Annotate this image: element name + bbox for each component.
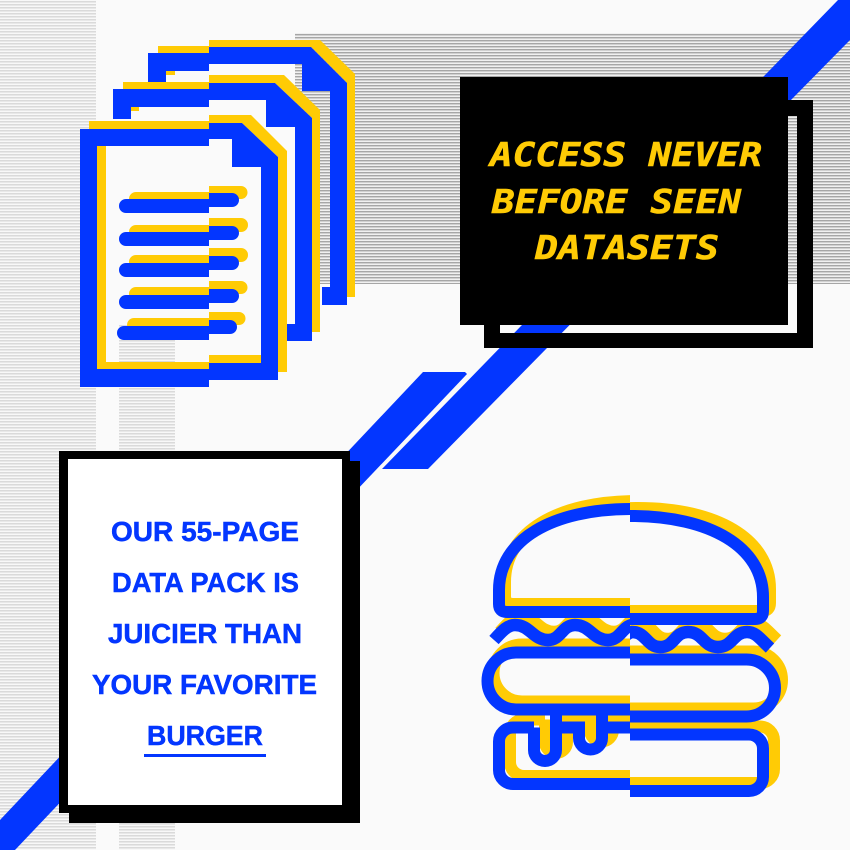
icon: stack of documents: [80, 40, 355, 387]
panel text: BURGER: [147, 720, 263, 751]
panel heading: ACCESS NEVER: [488, 135, 762, 174]
document: middle page: [113, 75, 320, 341]
underline: [144, 754, 266, 757]
document: front page: [80, 115, 287, 387]
document text lines: [117, 186, 248, 340]
burger left half: [482, 495, 630, 790]
icon: burger: [488, 501, 782, 791]
panel text: YOUR FAVORITE: [92, 669, 317, 700]
black panel: [460, 77, 788, 325]
offset black frame: [484, 100, 813, 348]
panel: access never before seen datasets: [460, 77, 813, 348]
panel heading: DATASETS: [534, 228, 719, 267]
box shadow: [69, 461, 360, 823]
panel text: OUR 55-PAGE: [111, 516, 299, 547]
hatch band: lower column: [119, 325, 175, 850]
panel: 55-page data pack: [59, 451, 360, 823]
box fill: [68, 459, 342, 805]
panel heading: BEFORE SEEN: [491, 182, 742, 221]
hatch band: upper right: [295, 33, 850, 284]
diagonal stripe: left: [0, 372, 467, 850]
burger right half: [630, 502, 788, 797]
hatch band: left: [0, 0, 96, 850]
panel text: DATA PACK IS: [112, 567, 299, 598]
document: back page: [148, 40, 355, 305]
panel text: [92, 516, 317, 751]
panel heading: [488, 135, 762, 267]
panel text: JUICIER THAN: [108, 618, 302, 649]
box border: [59, 451, 350, 813]
diagonal stripe: right: [382, 0, 850, 469]
